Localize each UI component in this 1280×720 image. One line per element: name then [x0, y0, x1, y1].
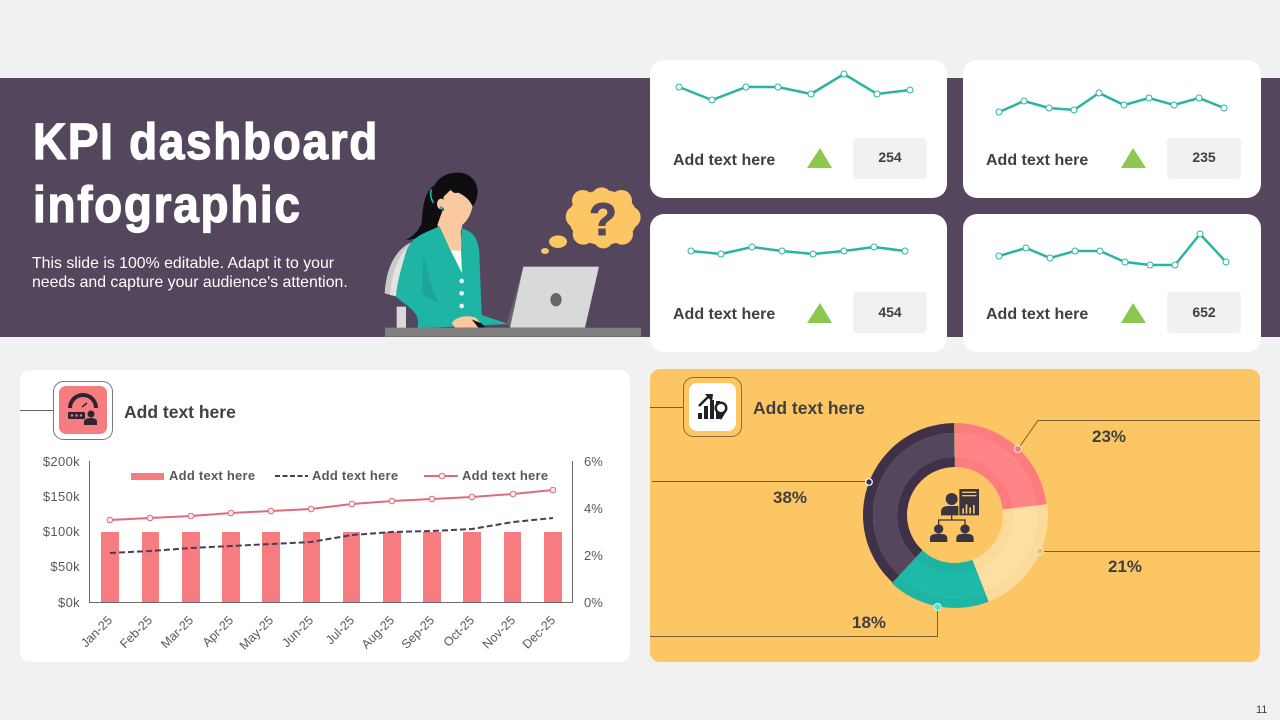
- sparkline 1: [676, 71, 913, 103]
- up arrow: [807, 303, 832, 323]
- month labels: Apr-25: [200, 613, 236, 650]
- chair: [385, 242, 424, 328]
- pink line series: [107, 487, 556, 523]
- month labels: Nov-25: [480, 613, 518, 652]
- percentage labels: 21%: [1108, 557, 1142, 576]
- month labels: [78, 613, 558, 653]
- icon: KPI growth: [650, 378, 742, 436]
- sparkline 3: [688, 244, 908, 257]
- donut heading: Add text here: [753, 398, 865, 418]
- right axis labels: 4%: [584, 501, 603, 516]
- headband and earring: [431, 189, 433, 203]
- card label: Add text here: [986, 306, 1088, 323]
- subtitle text: [32, 255, 348, 291]
- right axis labels: [584, 454, 603, 610]
- panel: donut chart: [650, 369, 1260, 662]
- axes: [90, 461, 572, 602]
- buttons: [459, 279, 464, 308]
- value box: [1167, 138, 1241, 179]
- KPI card 2: [963, 60, 1261, 198]
- month labels: Mar-25: [158, 613, 196, 651]
- question mark: ?: [589, 194, 617, 245]
- thought cloud: [541, 187, 641, 254]
- month labels: May-25: [237, 613, 276, 653]
- legend: [131, 468, 548, 483]
- neck and chest: [437, 210, 463, 257]
- value box: 652: [1192, 304, 1216, 320]
- title: KPI dashboard: [33, 114, 379, 171]
- sparkline 4: [996, 231, 1229, 268]
- ear: [437, 199, 445, 209]
- left axis labels: [43, 454, 80, 610]
- shirt: [451, 251, 462, 273]
- sparkline 2: [996, 90, 1227, 115]
- percentage labels: [773, 427, 1142, 632]
- left axis labels: $200k: [43, 454, 80, 469]
- value box: 454: [878, 304, 902, 320]
- legend: Add text here: [169, 468, 255, 483]
- icon: presenter and team: [930, 489, 979, 542]
- KPI card 4: [963, 214, 1261, 352]
- subtitle text: needs and capture your audience's attention.: [32, 274, 348, 291]
- percentage labels: 18%: [852, 613, 886, 632]
- percentage labels: 38%: [773, 488, 807, 507]
- up arrow: [1121, 148, 1146, 168]
- desk: [385, 328, 641, 337]
- legend: Add text here: [312, 468, 398, 483]
- month labels: Oct-25: [441, 613, 477, 650]
- subtitle text: This slide is 100% editable. Adapt it to your: [32, 255, 335, 272]
- face: [443, 190, 474, 225]
- percentage labels: 23%: [1092, 427, 1126, 446]
- segment: pink 23%: [868, 428, 1042, 602]
- ponytail: [406, 185, 445, 240]
- month labels: Aug-25: [359, 613, 397, 652]
- month labels: Feb-25: [117, 613, 155, 651]
- jacket: [396, 226, 508, 328]
- jacket shading: [422, 257, 438, 303]
- right axis labels: 6%: [584, 454, 603, 469]
- month labels: Jul-25: [323, 613, 357, 647]
- up arrow: [807, 148, 832, 168]
- value box: [853, 138, 927, 179]
- card label: Add text here: [673, 152, 775, 169]
- left axis labels: $100k: [43, 524, 80, 539]
- card label: Add text here: [986, 152, 1088, 169]
- chart heading: Add text here: [124, 402, 236, 422]
- top hair: [432, 173, 478, 207]
- left axis labels: $0k: [58, 595, 80, 610]
- dashed line series: [110, 518, 553, 553]
- laptop: [507, 267, 527, 328]
- KPI card 3: [650, 214, 947, 352]
- right axis labels: 0%: [584, 595, 603, 610]
- illustration: woman at laptop with question bubble: [385, 173, 641, 337]
- bars: [101, 532, 562, 602]
- panel: combo chart: [20, 370, 630, 662]
- left axis labels: $50k: [50, 559, 80, 574]
- left axis labels: $150k: [43, 489, 80, 504]
- month labels: Jun-25: [279, 613, 316, 650]
- leader: 18%: [650, 604, 941, 636]
- value box: 254: [878, 149, 902, 165]
- leader: 23%: [1014, 420, 1260, 452]
- title: infographic: [33, 177, 302, 234]
- hand: [452, 316, 484, 328]
- page number: 11: [1256, 704, 1267, 716]
- icon: gauge and person: [20, 382, 112, 440]
- donut chart: [867, 427, 1043, 603]
- title: [33, 114, 379, 234]
- value box: [1167, 292, 1241, 333]
- month labels: Jan-25: [78, 613, 115, 650]
- legend: Add text here: [462, 468, 548, 483]
- KPI card 1: [650, 60, 947, 198]
- header banner: [0, 78, 1280, 337]
- leader: 38%: [652, 479, 872, 485]
- card label: Add text here: [673, 306, 775, 323]
- segment: cream 21%: [867, 427, 1043, 603]
- segment: dark 38%: [868, 428, 1042, 602]
- month labels: Sep-25: [399, 613, 437, 652]
- right axis labels: 2%: [584, 548, 603, 563]
- leader: 21%: [1036, 548, 1260, 554]
- up arrow: [1121, 303, 1146, 323]
- value box: 235: [1192, 149, 1216, 165]
- value box: [853, 292, 927, 333]
- segment: teal 18%: [867, 427, 1043, 603]
- month labels: Dec-25: [520, 613, 558, 652]
